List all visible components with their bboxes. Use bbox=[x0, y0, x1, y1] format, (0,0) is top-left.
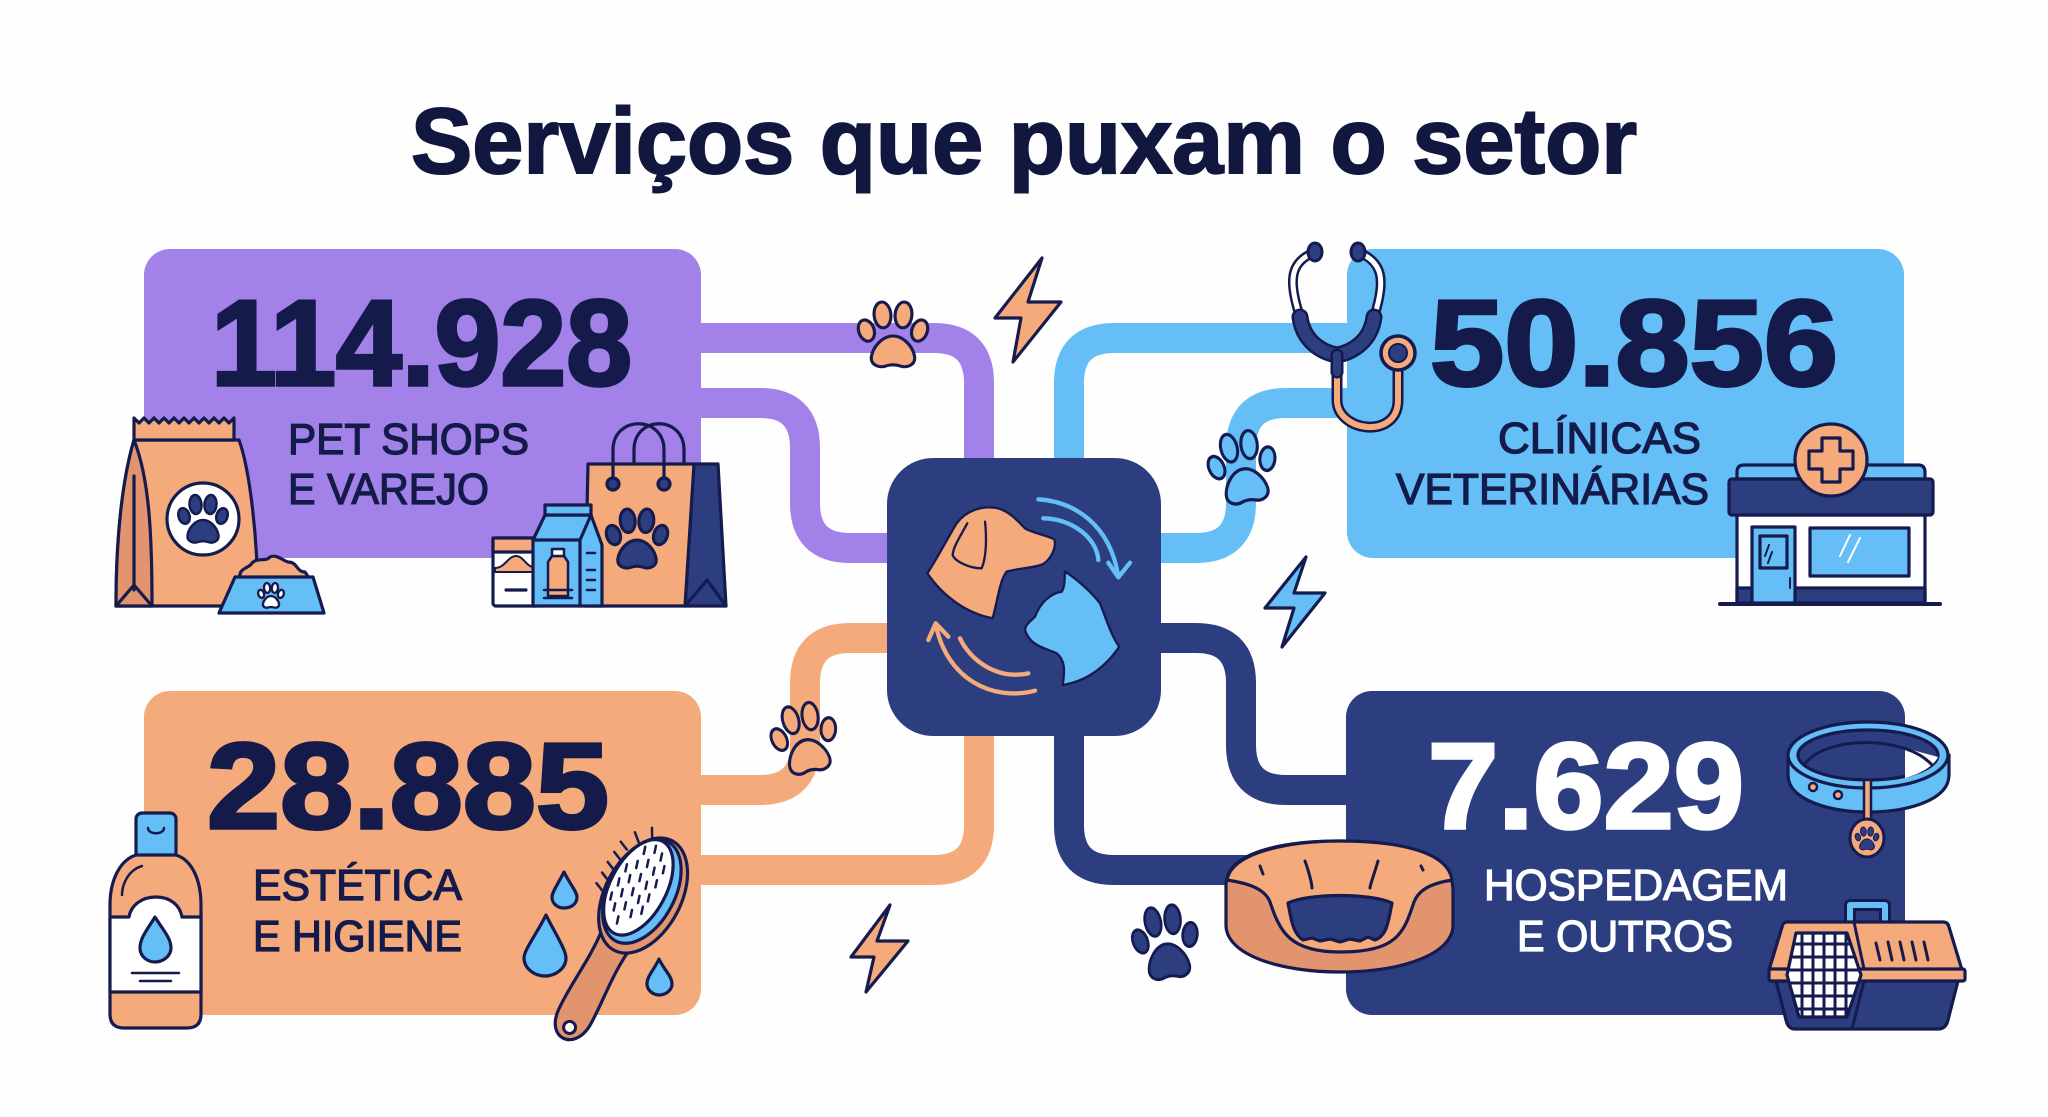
stat: 114.928: 114.928 bbox=[211, 275, 632, 411]
icon: shopping bag bbox=[585, 424, 726, 606]
stat: 7.629: 7.629 bbox=[1428, 718, 1744, 854]
icon: shampoo bottle bbox=[110, 813, 201, 1028]
bolt: top orange bbox=[995, 258, 1061, 362]
label: clinics bbox=[1396, 414, 1709, 514]
icon: brush bbox=[525, 817, 707, 1058]
label: grooming bbox=[253, 861, 463, 961]
icon: food bag bbox=[116, 418, 258, 606]
icon: milk carton bbox=[533, 505, 602, 606]
bolt: blue bbox=[1265, 557, 1325, 647]
stat: 50.856: 50.856 bbox=[1430, 275, 1838, 411]
icon: pet carrier bbox=[1769, 905, 1965, 1029]
icon: veterinary clinic bbox=[1720, 424, 1940, 604]
label: pet shops bbox=[288, 415, 529, 514]
label: clinics: VETERINÁRIAS bbox=[1396, 465, 1709, 514]
title: Serviços que puxam o setor bbox=[411, 89, 1637, 193]
center icon: dog and cat cycle bbox=[887, 458, 1161, 736]
icon: jar bbox=[493, 538, 539, 606]
icon: pet bed bbox=[1226, 841, 1453, 972]
paw: navy bbox=[1126, 901, 1206, 983]
label: lodging: E OUTROS bbox=[1517, 912, 1733, 961]
panel: grooming bbox=[144, 691, 701, 1015]
connectors: navy bbox=[1069, 638, 1352, 870]
panel: lodging bbox=[1346, 691, 1905, 1015]
label: lodging: HOSPEDAGEM bbox=[1484, 861, 1788, 910]
label: pet shops: PET SHOPS bbox=[288, 415, 529, 464]
stat: 28.885: 28.885 bbox=[207, 718, 609, 854]
panel: pet shops bbox=[144, 249, 701, 558]
paw: purple connector bbox=[856, 301, 930, 367]
bolt: bottom orange bbox=[851, 905, 908, 992]
label: grooming: ESTÉTICA bbox=[253, 861, 463, 910]
connectors: orange bbox=[695, 638, 979, 870]
icon: water drops bbox=[524, 872, 672, 995]
icon: food bowl bbox=[219, 556, 324, 613]
connectors: blue bbox=[1069, 338, 1353, 548]
icon: collar bbox=[1788, 722, 1949, 857]
panel: clinics bbox=[1347, 249, 1904, 558]
paw: blue connector bbox=[1201, 426, 1285, 508]
icon: stethoscope bbox=[1293, 243, 1415, 427]
label: clinics: CLÍNICAS bbox=[1498, 414, 1701, 463]
paw: orange connector bbox=[763, 697, 846, 779]
label: pet shops: E VAREJO bbox=[288, 465, 489, 514]
label: grooming: E HIGIENE bbox=[253, 912, 462, 961]
label: lodging bbox=[1484, 861, 1788, 961]
connectors: purple bbox=[695, 338, 979, 548]
